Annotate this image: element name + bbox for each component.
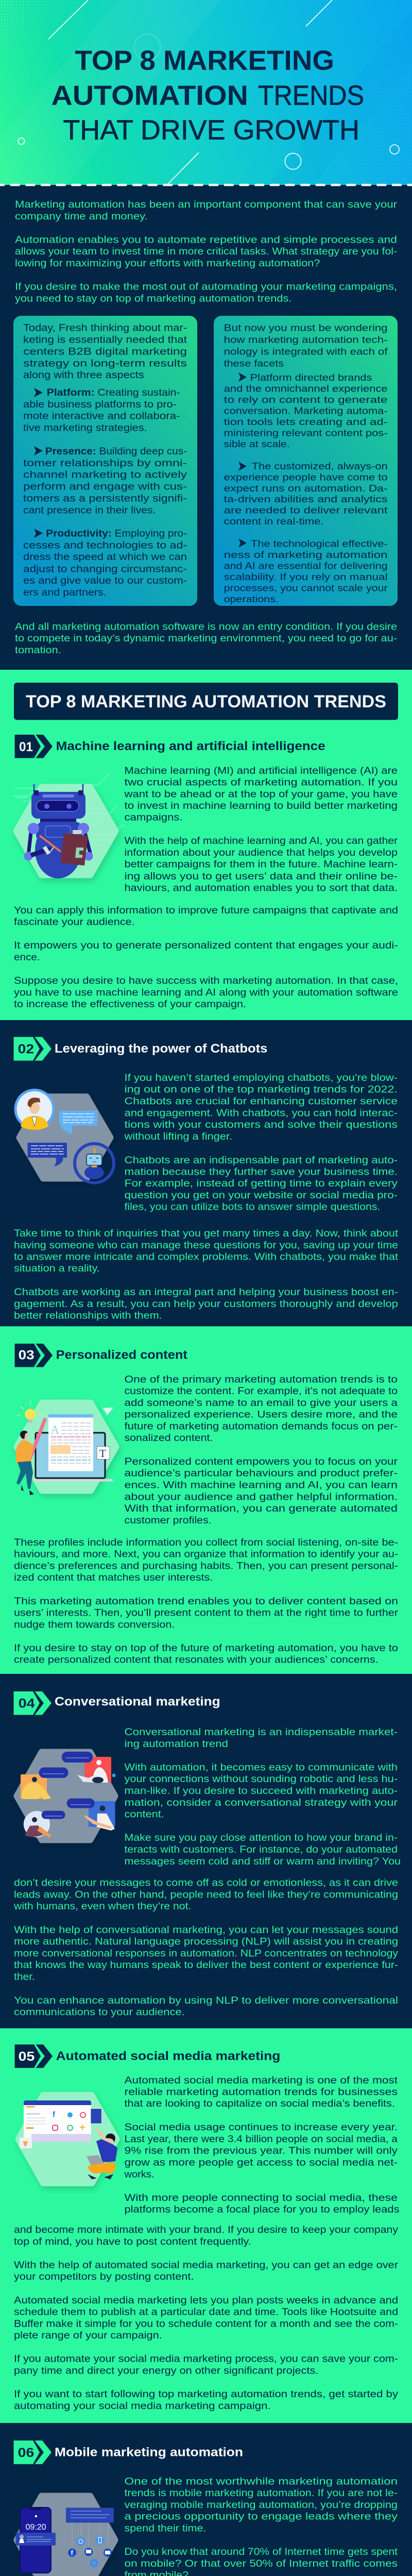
- trend 03 text: audience’s particular behaviours and product prefer-: [125, 1468, 398, 1479]
- trend 05 text: grow as more people get access to social media net-: [125, 2157, 398, 2168]
- panel: fresh thinking aspects: tomer relationships by omni-: [23, 458, 187, 469]
- trend 02 text: tions with your customers and solve their questions: [125, 1120, 398, 1130]
- trend 05 text: Last year, there were 3.4 billion people on social media, a: [125, 2134, 398, 2145]
- trend 05 text: your competitors by posting content.: [14, 2272, 194, 2282]
- trend 04 text: your connections without sounding robotic and less hu-: [125, 1774, 398, 1785]
- header banner: [0, 0, 412, 185]
- panel: how automation integrates: sible at scale.: [224, 438, 290, 449]
- panel: how automation integrates: experience people have come to: [224, 471, 388, 482]
- trend 02 text: without lifting a finger.: [124, 1131, 232, 1142]
- trend 02 heading: 02: [18, 1042, 34, 1056]
- panel: how automation integrates: ness of marketing automation: [224, 549, 388, 560]
- trend 05 text: automating your social media marketing campaign.: [14, 2401, 271, 2412]
- trend 03 text: ized content that matches user interests.: [14, 1572, 213, 1583]
- trend 01 heading: Machine learning and artificial intelligence: [56, 739, 325, 753]
- trend 04 text: that knows the way humans speak to deliver the best content or experience fur-: [14, 1960, 398, 1971]
- panel: how automation integrates: processes, you cannot scale your: [224, 582, 388, 593]
- trend 02 text: having someone who can manage these questions for you, saving up your time: [14, 1240, 398, 1251]
- trend 05 text: Social media usage continues to increase every year.: [125, 2122, 398, 2133]
- panel: how automation integrates: how marketing automation tech-: [224, 334, 388, 345]
- panel: fresh thinking aspects: along with three aspects: [23, 370, 144, 381]
- trend 01 text: ing allows you to get users’ data and their online be-: [125, 871, 398, 882]
- panel: fresh thinking aspects: centers B2B digital marketing: [23, 347, 187, 358]
- panel: how automation integrates: operations.: [224, 594, 279, 604]
- panel: fresh thinking aspects: adjust to changing circumstanc-: [23, 564, 187, 574]
- trend 01 text: campaigns.: [125, 812, 183, 823]
- main title: [52, 45, 364, 146]
- trend 06 text: One of the most worthwhile marketing automation: [125, 2476, 398, 2487]
- illustration: conversation with voice bubbles: [17, 1752, 115, 1840]
- heading: top 8 trends bar: [14, 683, 398, 720]
- panel: how automation integrates: tion tools lets creating and ad-: [224, 416, 388, 427]
- trend 02 text: situation a reality.: [14, 1263, 100, 1274]
- trend 02 heading: Leveraging the power of Chatbots: [55, 1042, 267, 1056]
- trend 02 text: [14, 1073, 399, 1321]
- trend 05 text: top of mind, you have to post content frequently.: [14, 2236, 251, 2247]
- panel: fresh thinking aspects: tomers as a persistently signifi-: [23, 494, 187, 504]
- illustration: laptop with personalized page: T: [99, 1447, 106, 1460]
- trend 04 text: don’t desire your messages to come off as cold or emotionless, as it can drive: [14, 1878, 398, 1889]
- trend 03 text: With that information, you can generate automated: [125, 1503, 398, 1514]
- intro paragraphs: [15, 199, 398, 304]
- trend 04 text: leads away. On the other hand, people need to feel like they’re communicating: [14, 1889, 398, 1900]
- trend 03 text: add someone’s name to an email to give your users a: [125, 1398, 398, 1409]
- trend 04 text: man-like. If you desire to succeed with marketing auto-: [125, 1786, 398, 1797]
- trend 02 text: Chatbots are an indispensable part of marketing auto-: [125, 1155, 398, 1166]
- trend 03 text: nudge them towards conversion.: [14, 1619, 175, 1630]
- intro paragraphs: If you desire to make the most out of automating your marketing campaigns,: [15, 282, 397, 293]
- trend 01 text: better campaigns for them in the future. Machine learn-: [125, 859, 398, 870]
- illustration: robot with clipboard: [14, 773, 124, 878]
- panel: how automation integrates: content in real-time.: [224, 516, 324, 527]
- trend 02 text: Chatbots are working as an integral part and helping your business boost en-: [14, 1287, 398, 1298]
- trend 06 text: spend their time.: [125, 2523, 206, 2534]
- illustration: mobile phone with notifications: 09:20: [26, 2523, 46, 2532]
- panel: how automation integrates: and the omnichannel experience: [224, 383, 388, 394]
- trend 02 text: If you haven’t started employing chatbots, you’re blow-: [125, 1073, 398, 1083]
- main title: THAT DRIVE GROWTH: [63, 115, 359, 146]
- trend 05 text: Buffer make it simple for you to schedule content for a month and see the com-: [14, 2318, 398, 2329]
- trend 01 text: With the help of machine learning and AI, you can gather: [125, 836, 398, 846]
- trend 04 text: ther.: [14, 1972, 35, 1982]
- trend 05 heading: Automated social media marketing: [56, 2049, 280, 2063]
- trend 04 heading: [13, 1691, 220, 1715]
- panel: how automation integrates: these facets: [224, 358, 284, 368]
- trend 04 text: mation, consider a conversational strategy with your: [125, 1798, 398, 1808]
- trend 04 text: with humans, even when they’re not.: [13, 1901, 191, 1912]
- trend 02 text: gagement. As a result, you can help your customers thoroughly and develop: [14, 1299, 398, 1310]
- trend 05 text: that are looking to capitalize on social media’s benefits.: [125, 2098, 395, 2109]
- trend 01 text: It empowers you to generate personalized content that engages your audi-: [14, 940, 398, 951]
- illustration: mobile phone with notifications: f: [71, 2549, 73, 2557]
- intro paragraphs: company time and money.: [15, 211, 148, 222]
- panel: fresh thinking aspects: channel marketing to actively: [23, 470, 187, 481]
- trend 04 heading: 04: [19, 1697, 35, 1711]
- trend 02 text: ing out on one of the top marketing trends for 2022.: [125, 1084, 398, 1095]
- trend 05 text: and become more intimate with your brand. If you desire to keep your company: [14, 2225, 399, 2235]
- illustration: social media dashboard: [19, 2095, 117, 2183]
- trend 02 text: to answer more intricate and complex problems. With chatbots, you make that: [14, 1252, 399, 1262]
- panel: how automation integrates: ministering relevant content pos-: [224, 428, 388, 438]
- trend 01 text: ence.: [14, 952, 40, 963]
- trend 05 text: works.: [124, 2169, 154, 2180]
- trend 05 text: plete range of your campaign.: [14, 2330, 162, 2341]
- trend 03 text: personalized experience. Users desire more, and the: [125, 1410, 398, 1420]
- panel: fresh thinking aspects: mote interactive and collabora-: [23, 411, 180, 422]
- trend 05 text: Automated social media marketing lets you plan posts weeks in advance and: [14, 2295, 398, 2306]
- trend 02 text: and engagement. With chatbots, you can hold interac-: [125, 1108, 398, 1118]
- trend 04 text: Make sure you pay close attention to how your brand in-: [125, 1833, 398, 1843]
- panel: how automation integrates: Platform directed brands: [250, 372, 372, 383]
- trend 02 text: mation because they further save your business time.: [125, 1166, 398, 1178]
- trend 01 text: to increase the effectiveness of your campaign.: [14, 999, 246, 1010]
- trend 06 heading: 06: [18, 2446, 34, 2460]
- panel: fresh thinking aspects: ers and partners.: [23, 587, 107, 598]
- panel: fresh thinking aspects: Platform: Creating sustain-: [47, 387, 180, 398]
- trend 03 text: These profiles include information you collect from social listening, on-site be-: [14, 1537, 398, 1548]
- panel: fresh thinking aspects: able business platforms to pro-: [23, 399, 177, 410]
- trend 06 text: a precious opportunity to engage leads where they: [125, 2512, 398, 2522]
- intro paragraphs: lowing for maximizing your efforts with marketing automation?: [15, 258, 320, 269]
- trend 05 text: With more people connecting to social media, these: [125, 2193, 398, 2204]
- intro paragraphs: you need to stay on top of marketing automation trends.: [15, 293, 291, 304]
- panel: fresh thinking aspects: [13, 316, 197, 606]
- trend 01 text: you have to use machine learning and AI along with your automation software: [14, 987, 398, 998]
- intro paragraphs: Marketing automation has been an important component that can save your: [15, 199, 398, 210]
- trend 03 heading: Personalized content: [56, 1348, 187, 1362]
- panel: how automation integrates: scalability. If you rely on manual: [224, 571, 388, 582]
- panel: fresh thinking aspects: perform and engage with cus-: [23, 481, 187, 492]
- trend 03 text: users’ interests. Then, you’ll present content to them at the right time to further: [14, 1608, 399, 1619]
- panel: how automation integrates: The customized, always-on: [252, 461, 388, 471]
- trend 04 text: teracts with customers. For instance, do your automated: [125, 1844, 398, 1855]
- panel: fresh thinking aspects: cesses and technologies to ad-: [23, 540, 187, 551]
- trend 04 text: Conversational marketing is an indispensable market-: [125, 1727, 398, 1738]
- trend 01 text: fascinate your audience.: [14, 917, 135, 928]
- trend 03 heading: [15, 1344, 187, 1367]
- trend 04 text: ing automation trend: [125, 1739, 228, 1750]
- main title: TOP 8 MARKETING: [75, 45, 334, 76]
- trend 03 text: haviours, and more. Next, you can organize that information to identify your au-: [14, 1549, 398, 1560]
- illustration: laptop with personalized page: A: [50, 1423, 60, 1437]
- panel: fresh thinking aspects: Productivity: Employing pro-: [46, 529, 187, 539]
- trend 03 text: future of marketing automation demands focus on per-: [125, 1421, 398, 1432]
- trend 03 text: [14, 1374, 399, 1665]
- main title: TRENDS: [258, 80, 364, 111]
- trend 05 text: pany time and direct your energy on other significant projects.: [14, 2365, 318, 2376]
- trend 06 heading: Mobile marketing automation: [55, 2445, 243, 2459]
- trend 03 text: create personalized content that resonates with your audiences’ concerns.: [14, 1655, 379, 1665]
- trend 05 heading: 05: [19, 2049, 35, 2064]
- trend 05 text: With the help of automated social media marketing, you can get an edge over: [14, 2260, 399, 2270]
- panel: fresh thinking aspects: es and give value to our custom-: [23, 575, 187, 586]
- panel: how automation integrates: are needed to deliver relevant: [224, 505, 388, 516]
- trend 06 text: trends is mobile marketing automation. If you are not le-: [125, 2488, 398, 2499]
- trend 01 text: two crucial aspects of marketing automation. If you: [125, 777, 398, 788]
- trend 02 heading: [13, 1037, 267, 1061]
- panel: fresh thinking aspects: cant presence in their lives.: [23, 505, 156, 516]
- illustration: social media dashboard: f: [53, 2110, 56, 2119]
- illustration: mobile phone with notifications: [16, 2496, 115, 2576]
- trend 06 heading: [13, 2441, 243, 2464]
- trend 05 text: [14, 2075, 400, 2412]
- trend 01 text: information about your audience that helps you develop: [125, 848, 398, 858]
- trend 04 text: [13, 1727, 401, 2018]
- trend 01 text: [14, 766, 398, 1010]
- trend 04 text: more authentic. Natural language processing (NLP) will assist you in creating: [14, 1937, 398, 1947]
- trend 05 text: reliable marketing automation trends for businesses: [125, 2087, 398, 2098]
- panel: fresh thinking aspects: tive marketing strategies.: [23, 422, 147, 433]
- panel: how automation integrates: ta-driven abilities and analytics: [224, 494, 388, 504]
- panel: how automation integrates: The technological effective-: [251, 538, 388, 549]
- trend 01 heading: 01: [19, 740, 33, 754]
- intro paragraphs: allows your team to invest time in more critical tasks. What strategy are you fol-: [15, 246, 397, 257]
- trend 04 text: more conversational responses in automation. NLP concentrates on technology: [14, 1948, 399, 1959]
- trend 03 text: customize the content. For example, it’s not adequate to: [125, 1386, 398, 1397]
- panel: fresh thinking aspects: dress the speed at which we can: [23, 552, 187, 563]
- trend 03 text: about your audience and gather helpful information.: [125, 1492, 398, 1502]
- panel: how automation integrates: conversation. Marketing automa-: [224, 405, 388, 416]
- trend 05 text: If you want to start following top marketing automation trends, get started by: [14, 2389, 399, 2400]
- intro conclusion: [15, 621, 397, 656]
- trend 01 text: You can apply this information to improve future campaigns that captivate and: [14, 905, 398, 916]
- trend 04 text: content.: [125, 1809, 164, 1820]
- panel: fresh thinking aspects: Today, Fresh thinking about mar-: [23, 323, 187, 334]
- trend 03 text: One of the primary marketing automation trends is to: [125, 1374, 398, 1385]
- trend 05 text: platforms become a focal place for you to employ leads: [125, 2205, 400, 2215]
- trend 04 text: communications to your audience.: [14, 2007, 185, 2018]
- trend 03 text: This marketing automation trend enables you to deliver content based on: [14, 1596, 398, 1607]
- panel: how automation integrates: nology is integrated with each of: [224, 346, 388, 357]
- panel: fresh thinking aspects: Presence: Building deep cus-: [45, 446, 187, 457]
- trend 03 heading: 03: [19, 1348, 35, 1363]
- panel: fresh thinking aspects: strategy on long-term results: [23, 358, 187, 369]
- trend 05 heading: [15, 2044, 280, 2068]
- trend 02 text: files, you can utilize bots to answer simple questions.: [125, 1202, 380, 1213]
- trend 01 heading: [15, 735, 325, 758]
- trend 05 text: schedule them to publish at a particular date and time. Tools like Hootsuite and: [14, 2307, 398, 2318]
- trend 05 text: If you automate your social media marketing process, you can save your com-: [14, 2354, 398, 2365]
- trend 03 text: If you desire to stay on top of the future of marketing automation, you have to: [14, 1643, 398, 1654]
- trend 02 text: Chatbots are crucial for enhancing customer service: [125, 1096, 398, 1107]
- intro paragraphs: Automation enables you to automate repetitive and simple processes and: [15, 234, 397, 245]
- trend 04 text: You can enhance automation by using NLP to deliver more conversational: [14, 1995, 398, 2006]
- panel: how automation integrates: to rely on content to generate: [224, 394, 388, 405]
- trend 04 heading: Conversational marketing: [55, 1695, 220, 1708]
- heading: top 8 trends bar: TOP 8 MARKETING AUTOMATION TRENDS: [26, 692, 386, 711]
- trend 06 text: [14, 2476, 398, 2576]
- trend 02 text: Take time to think of inquiries that you get many times a day. Now, think about: [14, 1228, 399, 1239]
- trend 05 text: 9% rise from the previous year. This number will only: [125, 2145, 398, 2157]
- trend 03 text: Personalized content empowers you to focus on your: [125, 1456, 398, 1467]
- panel: how automation integrates: expect runs on automation. Da-: [224, 483, 388, 494]
- trend 04 text: With the help of conversational marketing, you can let your messages sound: [14, 1925, 398, 1936]
- trend 02 text: better relationships with them.: [14, 1311, 162, 1321]
- trend 06 text: Do you know that around 70% of Internet time gets spent: [125, 2547, 398, 2557]
- trend 01 text: want to be ahead or at the top of your game, you have: [124, 789, 398, 800]
- trend 04 text: messages seem cold and stiff or warm and inviting? You: [125, 1856, 401, 1867]
- intro conclusion: to compete in today’s dynamic marketing environment, you need to go for au-: [15, 633, 397, 644]
- trend 03 text: sonalized content.: [125, 1433, 213, 1444]
- trend 03 text: dience’s preferences and purchasing habits. Then, you can present personal-: [14, 1561, 398, 1571]
- main title: AUTOMATION: [52, 80, 248, 111]
- panel: fresh thinking aspects: keting is essentially needed that: [23, 335, 187, 345]
- trend 06 text: on mobile? Or that over 50% of Internet traffic comes: [125, 2558, 398, 2569]
- panel: how automation integrates: [214, 316, 398, 606]
- trend 02 text: For example, instead of getting time to explain every: [125, 1178, 398, 1189]
- trend 03 text: ences. With machine learning and AI, you can learn: [125, 1480, 398, 1490]
- panel: how automation integrates: and AI are essential for delivering: [224, 560, 388, 571]
- intro conclusion: And all marketing automation software is now an entry condition. If you desire: [15, 621, 397, 632]
- intro conclusion: tomation.: [15, 645, 61, 656]
- trend 03 text: customer profiles.: [125, 1515, 212, 1526]
- trend 05 text: Automated social media marketing is one of the most: [125, 2075, 398, 2086]
- trend 01 text: Machine learning (MI) and artificial intelligence (AI) are: [125, 766, 398, 776]
- panel: how automation integrates: But now you must be wondering: [224, 323, 388, 333]
- trend 01 text: to invest in machine learning to build better marketing: [125, 801, 398, 811]
- illustration: chat between person and bot: [15, 1090, 114, 1183]
- trend 01 text: haviours, and automation enables you to sort that data.: [125, 883, 398, 893]
- trend 02 text: question you get on your website or social media pro-: [125, 1190, 398, 1201]
- illustration: laptop with personalized page: [15, 1400, 116, 1495]
- trend 01 text: Suppose you desire to have success with marketing automation. In that case,: [14, 976, 398, 987]
- trend 06 text: veraging mobile marketing automation, you’re dropping: [125, 2500, 398, 2511]
- trend 04 text: With automation, it becomes easy to communicate with: [125, 1762, 398, 1773]
